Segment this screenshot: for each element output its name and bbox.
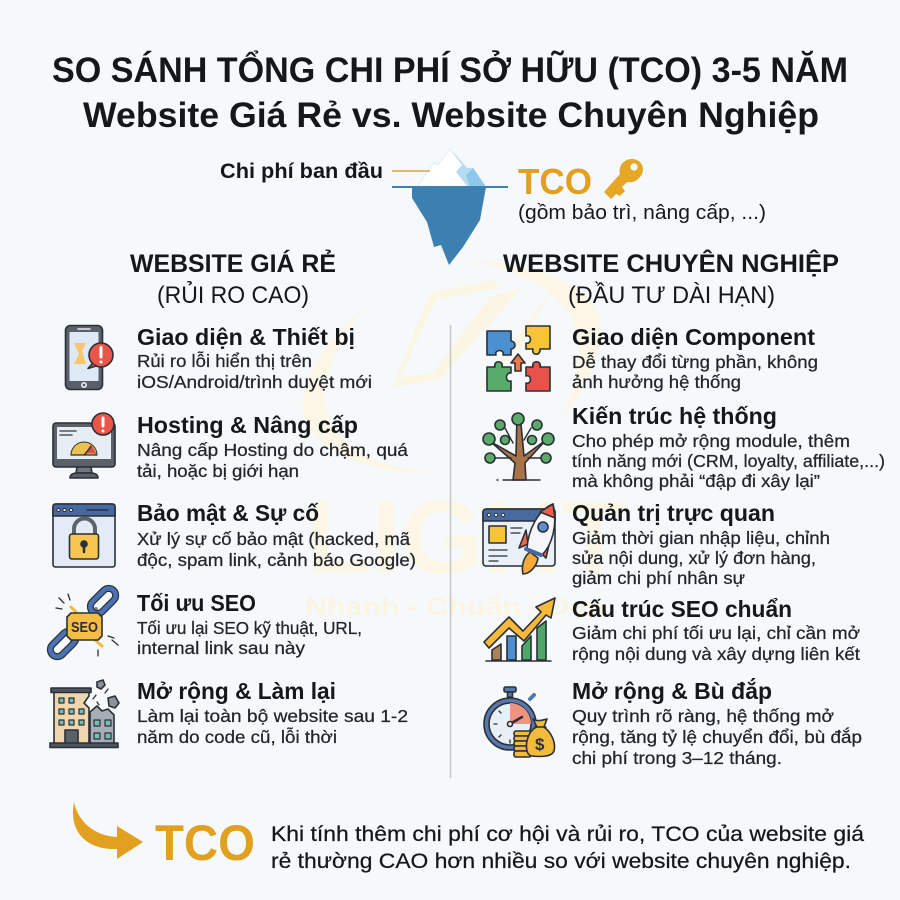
watermark: logo (303, 260, 626, 621)
item: hosting and upgrades (53, 412, 408, 481)
item: component interface (487, 324, 818, 392)
heading: cheap website: WEBSITE GIÁ RẺ (130, 248, 336, 278)
item text: Tối ưu SEO (137, 590, 256, 616)
item text: Mở rộng & Làm lại (137, 678, 336, 704)
item: SEO optimization (47, 585, 362, 660)
item text: Cấu trúc SEO chuẩn (572, 596, 792, 622)
item: SEO structure (484, 596, 860, 664)
icon: crumbling building (50, 680, 119, 748)
item text (572, 596, 860, 664)
label: initial cost: Chi phí ban đầu (220, 160, 383, 183)
panel: cheap website column (47, 324, 416, 748)
item: interface and devices (66, 324, 372, 392)
item text: Cho phép mở rộng module, thêm (572, 431, 850, 451)
heading: cheap website (130, 248, 336, 309)
icon: broken SEO chain (47, 585, 119, 660)
panel: conclusion (73, 802, 864, 873)
item text: ảnh hưởng hệ thống (572, 372, 741, 392)
conclusion text: Khi tính thêm chi phí cơ hội và rủi ro, TCO của website giá (271, 822, 864, 846)
item text: internal link sau này (137, 638, 305, 658)
item text: năm do code cũ, lỗi thời (137, 726, 337, 747)
icon: key (604, 159, 643, 199)
item: visual admin (483, 500, 830, 588)
watermark: logo: Nhanh - Chuẩn - Đẹp (305, 593, 605, 621)
title: Website Giá Rẻ vs. Website Chuyên Nghiệp (83, 96, 819, 135)
TCO subtitle: (gồm bảo trì, nâng cấp, ...) (518, 202, 766, 224)
item text (137, 590, 362, 658)
item text: Giao diện & Thiết bị (137, 324, 355, 350)
heading: professional website: (ĐẦU TƯ DÀI HẠN) (568, 281, 775, 309)
icon: browser with padlock (53, 504, 115, 567)
conclusion text: rẻ thường CAO hơn nhiều so với website chuyên nghiệp. (271, 849, 851, 873)
item text: Hosting & Nâng cấp (137, 412, 358, 438)
icon: iceberg (392, 149, 508, 265)
item text: Giảm chi phí tối ưu lại, chỉ cần mở (572, 623, 860, 643)
item text: Giảm thời gian nhập liệu, chỉnh (572, 528, 830, 548)
item text (137, 324, 372, 392)
heading: professional website: WEBSITE CHUYÊN NGHIỆP (503, 248, 839, 278)
icon: monitor with gauge (53, 413, 115, 478)
item text (572, 324, 818, 392)
icon: stopwatch and money bag (484, 687, 555, 757)
item text: Nâng cấp Hosting do chậm, quá (137, 440, 408, 460)
item text (572, 500, 830, 588)
icon: browser with rocket (483, 504, 555, 574)
item text: Rủi ro lỗi hiển thị trên (137, 350, 312, 371)
item text: độc, spam link, cảnh báo Google) (137, 550, 416, 570)
item text: tải, hoặc bị giới hạn (137, 461, 299, 481)
icon: growth chart (484, 598, 555, 661)
item: scaling and offset (484, 677, 862, 768)
item text: giảm chi phí nhân sự (572, 568, 745, 588)
icon: puzzle pieces (487, 326, 550, 391)
item: system architecture (483, 403, 885, 491)
item text (137, 500, 416, 570)
icon: stopwatch and money bag: $ (535, 735, 545, 754)
item text: iOS/Android/trình duyệt mới (137, 372, 372, 392)
TCO conclusion label: TCO (155, 815, 255, 871)
item text: chi phí trong 3–12 tháng. (572, 748, 782, 768)
heading: cheap website: (RỦI RO CAO) (157, 280, 309, 309)
title (52, 50, 848, 135)
heading: professional website (503, 248, 839, 309)
item text: tính năng mới (CRM, loyalty, affiliate,...) (572, 451, 885, 471)
title: SO SÁNH TỔNG CHI PHÍ SỞ HỮU (TCO) 3-5 NĂM (52, 50, 848, 90)
item text: Kiến trúc hệ thống (572, 403, 777, 429)
icon: phone with warning (66, 326, 113, 390)
item text: Giao diện Component (572, 324, 815, 350)
icon: tree (483, 413, 554, 480)
item: security (53, 500, 416, 570)
item text: Mở rộng & Bù đắp (572, 677, 772, 704)
item text: Quản trị trực quan (572, 500, 775, 526)
item text: mà không phải “đập đi xây lại” (572, 471, 820, 491)
item text (137, 412, 408, 481)
item text: rộng nội dung và xây dựng liên kết (572, 644, 860, 664)
conclusion text (271, 822, 864, 873)
item text (572, 403, 885, 491)
item: scaling and rebuild (50, 678, 408, 748)
watermark: logo: LIGHT (306, 480, 626, 596)
arrow (73, 802, 143, 859)
TCO label: TCO (518, 161, 592, 202)
item text: Bảo mật & Sự cố (137, 500, 319, 526)
item text: Làm lại toàn bộ website sau 1-2 (137, 706, 408, 726)
item text: sửa nội dung, xử lý đơn hàng, (572, 548, 816, 568)
item text (137, 678, 408, 747)
item text: Tối ưu lại SEO kỹ thuật, URL, (137, 618, 362, 638)
icon: broken SEO chain: SEO (71, 619, 98, 636)
item text: Xử lý sự cố bảo mật (hacked, mã (137, 529, 410, 549)
item text (572, 677, 862, 768)
item text: Quy trình rõ ràng, hệ thống mở (572, 706, 834, 726)
panel: professional website column (483, 324, 885, 768)
item text: rộng, tăng tỷ lệ chuyển đổi, bù đắp (572, 726, 862, 747)
item text: Dễ thay đổi từng phần, không (572, 351, 818, 372)
